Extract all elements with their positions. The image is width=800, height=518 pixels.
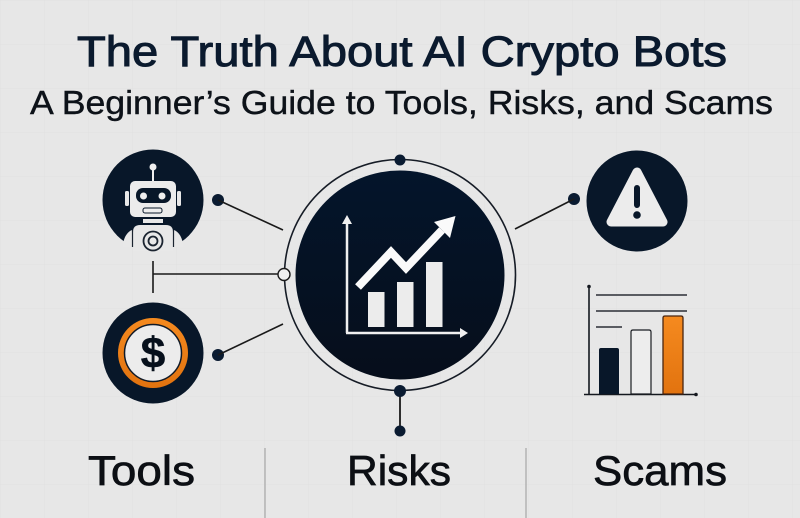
connector: T junction to hub xyxy=(153,261,280,293)
icon: dollar coin: $ xyxy=(141,329,165,378)
title: The Truth About AI Crypto Bots xyxy=(77,28,727,76)
connector: coin to hub xyxy=(212,324,283,361)
panel: central chart hub xyxy=(278,154,516,436)
connector: warning to hub xyxy=(515,193,580,229)
subtitle: A Beginner’s Guide to Tools, Risks, and Scams xyxy=(30,84,773,121)
label: Tools: Tools xyxy=(88,447,195,494)
hub white node xyxy=(278,268,290,280)
hub top node xyxy=(394,154,406,166)
chart trend arrow xyxy=(358,216,456,287)
icon: dollar coin xyxy=(102,302,204,404)
connector: robot to hub xyxy=(212,194,283,230)
bar chart: scams xyxy=(584,285,698,396)
chart axes xyxy=(342,215,468,338)
chart bars xyxy=(368,262,442,327)
icon: robot xyxy=(102,150,204,251)
label: Risks: Risks xyxy=(347,447,451,494)
icon: warning xyxy=(586,150,688,252)
hub stem and bottom nodes xyxy=(394,385,406,436)
label: Scams: Scams xyxy=(593,447,727,494)
